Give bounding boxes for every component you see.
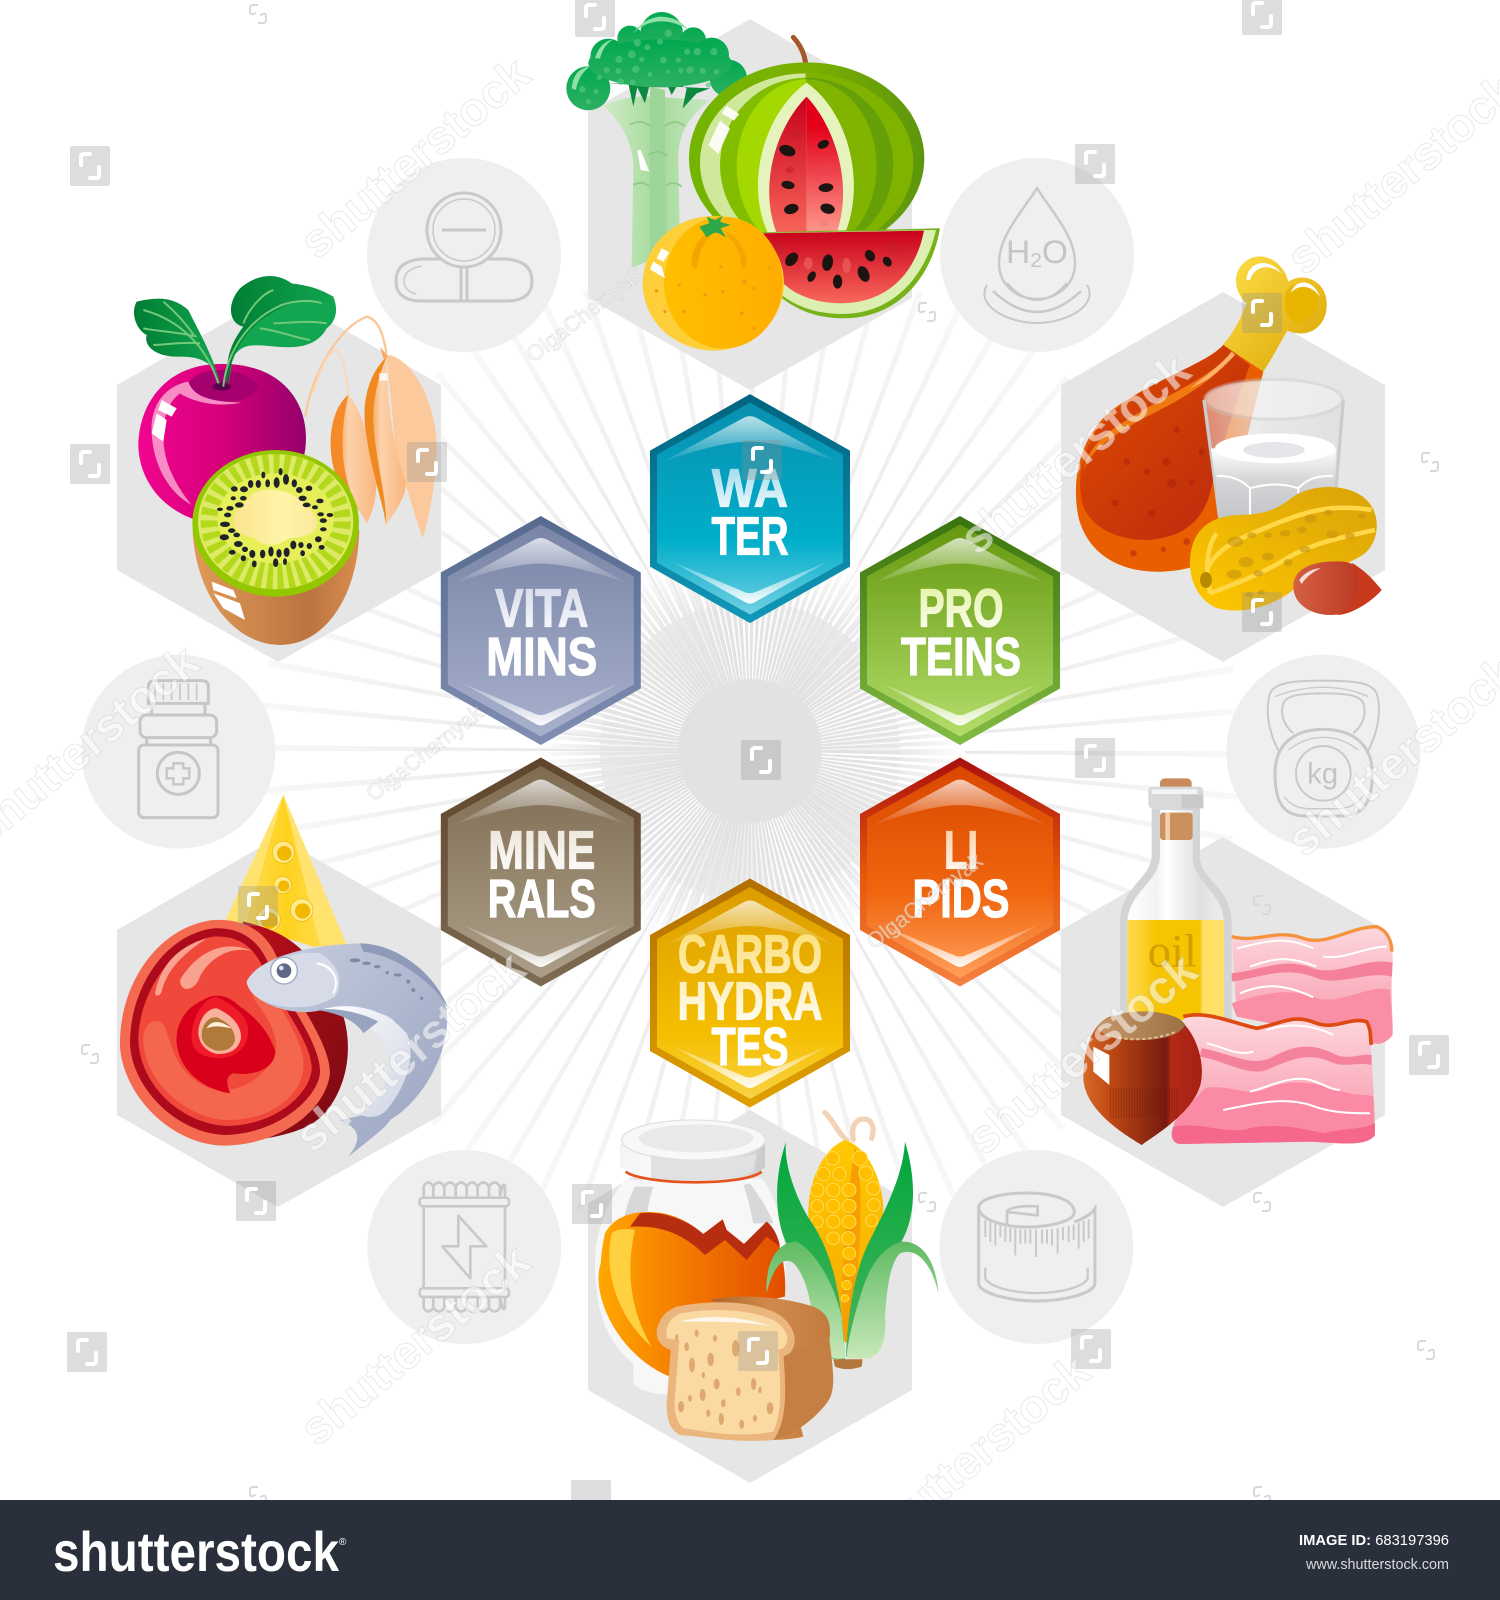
hexagon: LIPIDS xyxy=(860,758,1060,986)
central starburst rays xyxy=(470,471,1030,1031)
hexagon: LIPIDS: LI xyxy=(944,820,978,880)
hazelnut xyxy=(1083,1011,1202,1145)
site url: www.shutterstock.com xyxy=(1305,1556,1449,1573)
food group: water-rich foods (broccoli, watermelon, orange) xyxy=(566,12,940,351)
hexagon: PROTEINS xyxy=(860,516,1060,745)
icon: kettlebell kg xyxy=(1226,655,1420,849)
back bacon strip xyxy=(1232,927,1393,1044)
hexagon: WATER: TER xyxy=(712,507,788,567)
hexagon: CARBOHYDRATES: TES xyxy=(712,1017,788,1077)
hexagon: CARBOHYDRATES: CARBO xyxy=(678,924,822,984)
hexagon: WATER xyxy=(650,394,850,623)
honey jar xyxy=(595,1120,786,1395)
hexagon: LIPIDS: PIDS xyxy=(912,869,1010,929)
food group: carbohydrates (honey jar, bread, corn) xyxy=(595,1113,938,1441)
chicken drumstick xyxy=(1076,256,1327,572)
beet leaves xyxy=(134,276,336,387)
hexagon: MINERALS: MINE xyxy=(488,820,595,880)
watermark text: shutterstock xyxy=(284,940,535,1162)
icon: water drop H2O: O xyxy=(1042,234,1068,270)
watermark contributor name xyxy=(361,260,988,954)
peanut xyxy=(1190,487,1377,611)
icon: water drop H2O xyxy=(940,158,1134,352)
bread loaf xyxy=(657,1297,833,1441)
footer logo: shutterstock xyxy=(53,1520,340,1583)
icon: supplement jar xyxy=(81,655,275,849)
food group: vitamins (beetroot, kiwi, oats) xyxy=(134,276,437,645)
oil bottle xyxy=(1120,778,1232,1030)
front bacon strip xyxy=(1172,1015,1375,1144)
watermark text: shutterstock xyxy=(289,1233,540,1455)
kiwi xyxy=(192,450,359,645)
corn cob xyxy=(766,1113,938,1369)
hexagon: PROTEINS: TEINS xyxy=(901,627,1021,687)
hexagon: CARBOHYDRATES xyxy=(650,878,850,1108)
bottle label text: oil xyxy=(1148,926,1197,978)
hexagon: WATER: WA xyxy=(712,459,788,519)
broccoli xyxy=(566,12,747,268)
watermark text: shutterstock xyxy=(289,46,540,268)
steak xyxy=(120,920,348,1146)
grey hexagon backdrops xyxy=(117,19,1385,1483)
orange xyxy=(643,216,784,351)
hexagon: PROTEINS: PRO xyxy=(918,578,1004,638)
beet xyxy=(138,364,306,524)
glass of milk xyxy=(1204,379,1343,520)
icon: water drop H2O: 2 xyxy=(1030,250,1042,272)
watermelon slice xyxy=(760,228,940,318)
image id: IMAGE ID: 683197396 xyxy=(1299,1532,1449,1549)
watermelon xyxy=(689,37,924,254)
icon: kettlebell kg: kg xyxy=(1307,757,1338,790)
food group: proteins (chicken leg, milk, peanut) xyxy=(1076,256,1382,615)
hexagon: MINERALS: RALS xyxy=(488,869,596,929)
registered mark: ® xyxy=(339,1537,347,1548)
watermark contributor name: OlgaChernyak xyxy=(361,699,488,806)
watermark text: shutterstock xyxy=(949,342,1200,564)
red-skinned nut xyxy=(1293,561,1382,615)
hexagon: VITAMINS: VITA xyxy=(495,578,588,638)
watermark contributor name: OlgaChernyak xyxy=(861,847,988,954)
food group: minerals (cheese, steak, fish) xyxy=(120,795,448,1157)
watermark text: shutterstock xyxy=(849,1343,1100,1565)
watermark text: shutterstock xyxy=(956,942,1207,1164)
hexagon: MINERALS xyxy=(441,758,641,986)
oat ears xyxy=(305,317,437,538)
watermark contributor name: OlgaChernyak xyxy=(521,260,648,367)
icon: water drop H2O: H xyxy=(1006,234,1029,270)
food group: lipids (oil bottle, bacon, hazelnut) xyxy=(1083,778,1393,1145)
icon: measuring tape xyxy=(939,1150,1133,1344)
footer bar xyxy=(0,1500,1500,1600)
cheese wedge xyxy=(226,795,347,947)
hexagon: VITAMINS xyxy=(441,516,641,745)
icon: energy bar xyxy=(367,1150,561,1344)
hexagon: VITAMINS: MINS xyxy=(486,627,597,687)
icon: pill tablets xyxy=(367,158,561,352)
hexagon: CARBOHYDRATES: HYDRA xyxy=(678,971,822,1031)
fish xyxy=(247,943,448,1157)
